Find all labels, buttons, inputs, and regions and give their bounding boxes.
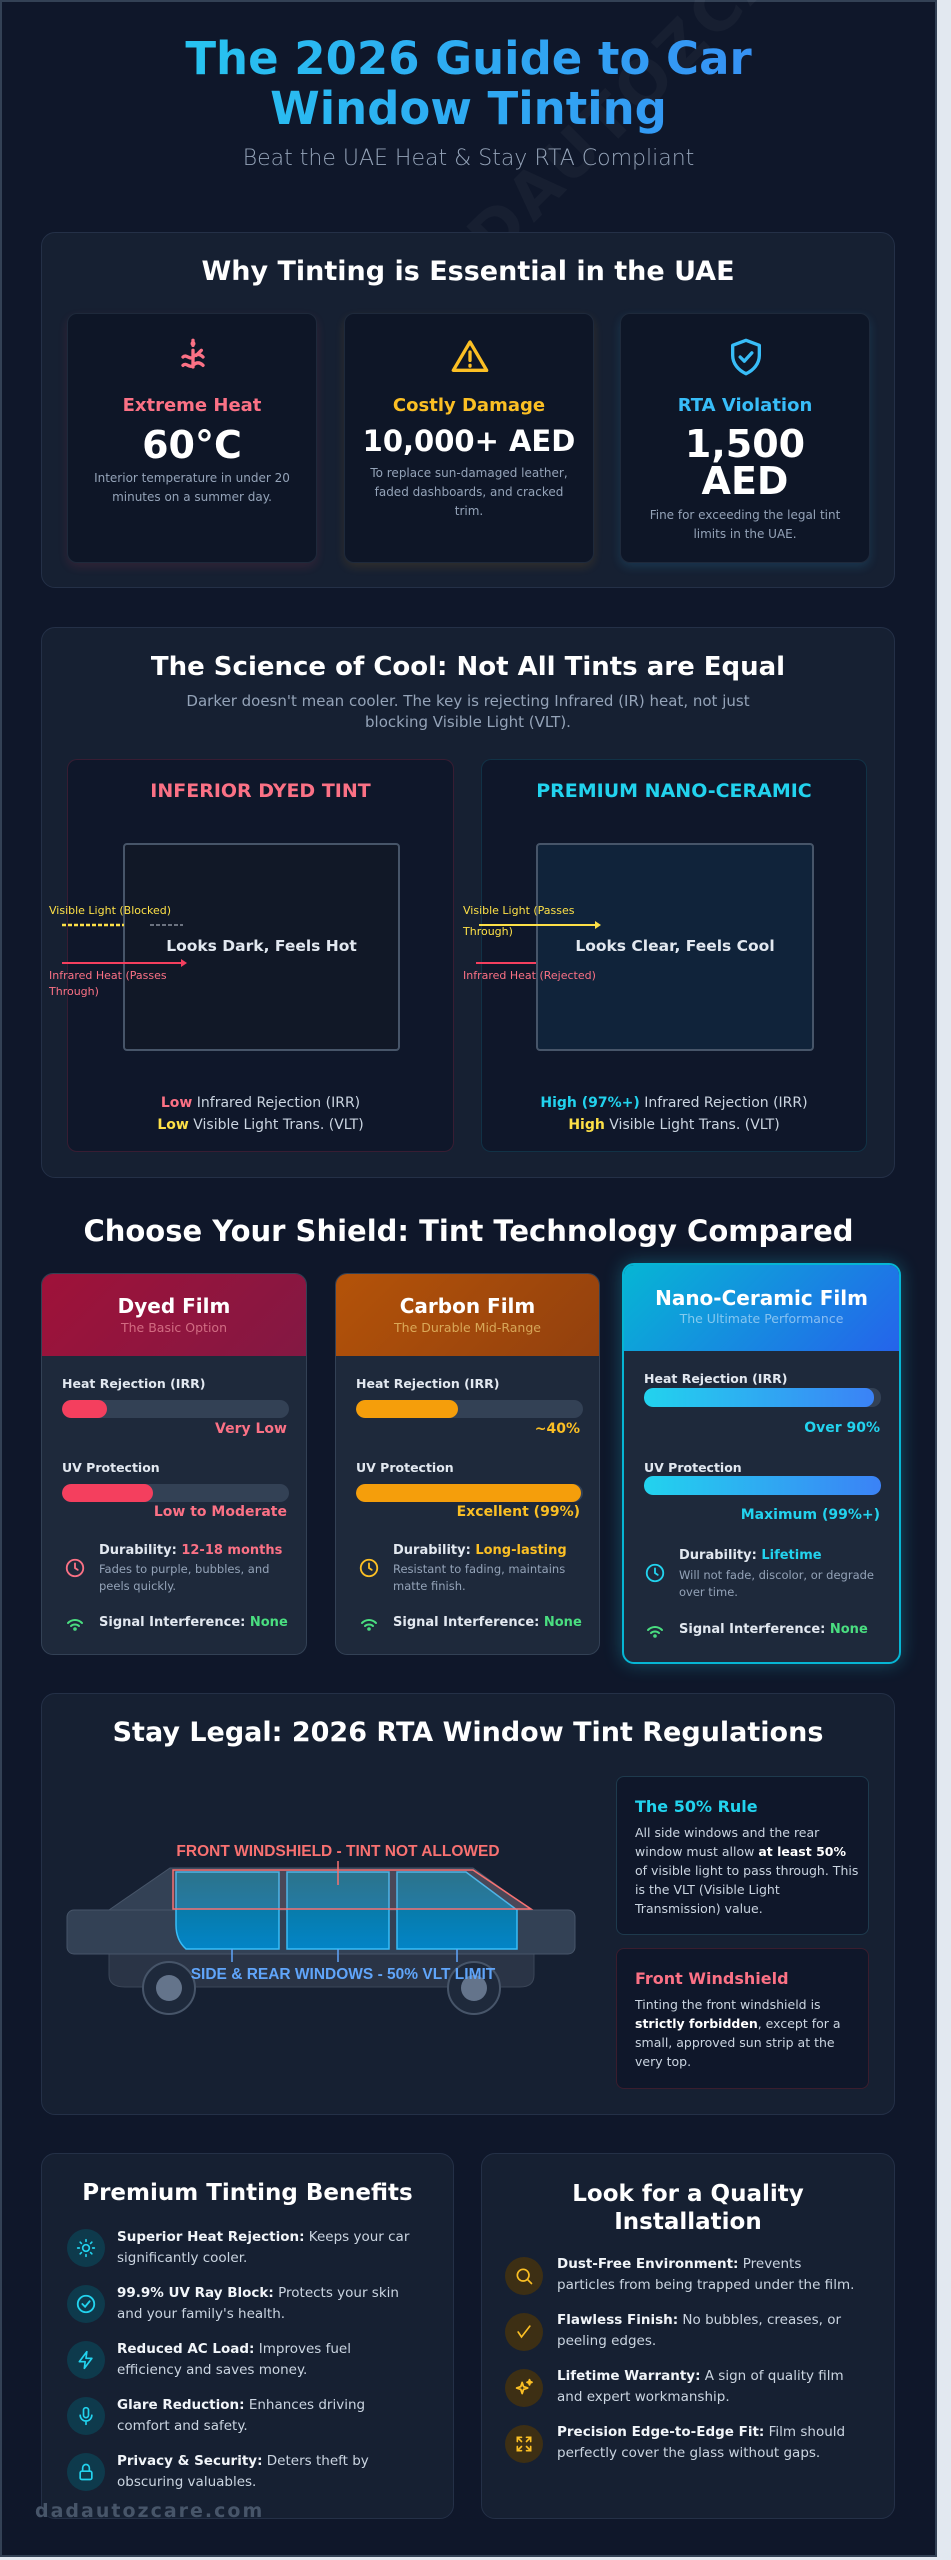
panel: quality installation: Dust-Free Environment: Prevents [557,2256,801,2272]
light arrows [462,904,601,982]
card: carbon film: The Durable Mid-Range [394,1320,541,1335]
heading: Stay Legal: 2026 RTA Window Tint Regulations [113,1717,823,1748]
light arrows: Visible Light (Blocked) [49,904,171,917]
light arrows: Infrared Heat (Rejected) [463,969,596,982]
light arrows: Infrared Heat (Passes [49,969,167,982]
heading: Why Tinting is Essential in the UAE [201,256,735,287]
panel: premium benefits: Premium Tinting Benefits [82,2180,413,2206]
card: dyed film: Signal Interference: None [99,1615,288,1630]
item: warranty [505,2369,543,2407]
panel: science of cool [41,627,895,1178]
light arrows: Through) [48,985,99,998]
card: dyed film: Heat Rejection (IRR) [62,1376,205,1391]
item: precision fit [505,2425,543,2463]
card: carbon film: UV Protection [356,1460,454,1475]
card: dyed film: Durability: 12-18 months [99,1543,282,1558]
card: RTA violation: 1,500 [685,422,805,466]
card: carbon film: Resistant to fading, maintains matte finish. [393,1562,565,1593]
heading: choose your shield: Choose Your Shield: Tint Technology Compared [83,1214,854,1248]
panel: dyed tint diagram [67,759,454,1152]
card: extreme heat: Interior temperature in under 20 minutes on a summer day. [94,471,290,504]
car diagram: FRONT WINDSHIELD - TINT NOT ALLOWED [176,1843,500,1860]
panel: quality installation: particles from being trapped under the film. [557,2277,854,2293]
item: flawless [505,2313,543,2351]
panel: dyed tint diagram: INFERIOR DYED TINT [150,780,371,802]
card: carbon film: Carbon Film [400,1294,535,1318]
car diagram [66,1843,576,2015]
panel: premium benefits: efficiency and saves money. [117,2362,307,2378]
title [0,34,937,134]
card: costly damage: 10,000+ AED [363,424,575,458]
panel: nano ceramic diagram: High (97%+) Infrared Rejection (IRR) [540,1095,808,1111]
panel: premium benefits: Glare Reduction: Enhances driving [117,2397,365,2413]
intro text: Darker doesn't mean cooler. The key is rejecting Infrared (IR) heat, not just [186,692,750,710]
panel: premium benefits [41,2153,454,2519]
intro text [186,692,750,731]
intro text: blocking Visible Light (VLT). [365,713,571,731]
card: carbon film: Durability: Long-lasting [393,1543,567,1558]
benefit: glare [67,2397,105,2435]
benefit: uv [67,2285,105,2323]
benefit: ac [67,2341,105,2379]
card: dyed film [41,1273,307,1655]
info: front windshield [616,1948,869,2089]
card: carbon film: Excellent (99%) [457,1504,580,1520]
panel: premium benefits: 99.9% UV Ray Block: Protects your skin [117,2285,399,2301]
panel: dyed tint diagram: Looks Dark, Feels Hot [166,937,357,955]
icon: thermometer [181,338,205,369]
card: costly damage: To replace sun-damaged leather, faded dashboards, and cracked trim. [370,466,568,518]
panel: premium benefits: and your family's health. [117,2306,285,2322]
card: nano-ceramic film: Durability: Lifetime [679,1548,822,1563]
info: 50% rule [616,1776,869,1935]
card: extreme heat [67,313,317,563]
panel: quality installation: Lifetime Warranty: A sign of quality film [557,2368,844,2384]
card: nano-ceramic film: Will not fade, discolor, or degrade over time. [679,1568,874,1599]
card: carbon film: Heat Rejection (IRR) [356,1376,499,1391]
card: RTA violation: Fine for exceeding the legal tint limits in the UAE. [650,508,840,541]
panel: premium benefits: Privacy & Security: Deters theft by [117,2453,369,2469]
panel: stay legal [41,1693,895,2115]
card: nano-ceramic film: The Ultimate Performance [680,1311,843,1326]
car diagram: SIDE & REAR WINDOWS - 50% VLT LIMIT [191,1966,496,1983]
card: nano-ceramic film: Signal Interference: None [679,1622,868,1637]
benefit: privacy [67,2453,105,2491]
glass box [536,843,814,1051]
card: dyed film: Low to Moderate [154,1504,287,1520]
card: nano-ceramic film: Maximum (99%+) [741,1507,880,1523]
panel: nano ceramic diagram: High Visible Light Trans. (VLT) [568,1117,780,1133]
info: front windshield: Front Windshield [635,1969,789,1988]
card: RTA violation: RTA Violation [678,395,812,416]
panel: premium benefits: Superior Heat Rejection: Keeps your car significantly cooler. [117,2229,409,2266]
glass box [123,843,400,1051]
card: dyed film: Very Low [215,1421,287,1437]
card: RTA violation [620,313,870,563]
card: nano-ceramic film: Nano-Ceramic Film [655,1286,868,1310]
light arrows [48,904,187,998]
panel: quality installation: perfectly cover the glass without gaps. [557,2445,820,2461]
card: costly damage [344,313,594,563]
panel: premium benefits: obscuring valuables. [117,2474,256,2490]
panel: quality installation: Precision Edge-to-Edge Fit: Film should [557,2424,845,2440]
title: The 2026 Guide to Car [185,32,752,85]
panel: quality installation: and expert workmanship. [557,2389,730,2405]
info: 50% rule: All side windows and the rear window must allow at least 50% of visible light to pass through. This is the VLT (Visible Light Transmission) value. [635,1825,858,1916]
card: dyed film: The Basic Option [121,1320,227,1335]
panel: quality installation [481,2153,895,2519]
light arrows: Visible Light (Passes [463,904,575,917]
subtitle: Beat the UAE Heat & Stay RTA Compliant [243,146,694,171]
icon: warning [452,340,488,372]
panel: quality installation: peeling edges. [557,2333,656,2349]
card: nano-ceramic film: Over 90% [804,1420,880,1436]
card: nano-ceramic film [622,1263,901,1664]
panel: nano ceramic diagram [481,759,867,1152]
card: carbon film [335,1273,600,1655]
panel: quality installation: Look for a Quality [572,2181,804,2207]
panel: why tinting [41,232,895,588]
card: nano-ceramic film: Heat Rejection (IRR) [644,1371,787,1386]
card: dyed film: UV Protection [62,1460,160,1475]
heading: The Science of Cool: Not All Tints are Equal [151,652,785,682]
panel: nano ceramic diagram: PREMIUM NANO-CERAMIC [536,780,812,802]
item: dust-free [505,2257,543,2295]
card: dyed film: Fades to purple, bubbles, and peels quickly. [99,1562,269,1593]
card: RTA violation: AED [702,459,788,503]
card: nano-ceramic film: UV Protection [644,1460,742,1475]
card: dyed film: Dyed Film [118,1294,230,1318]
watermark footer: dadautozcare.com [35,2500,264,2522]
title: Window Tinting [270,82,667,135]
icon: shield [731,338,761,376]
panel: quality installation: Flawless Finish: No bubbles, creases, or [557,2312,841,2328]
card: extreme heat: 60°C [142,423,242,467]
panel: premium benefits: Reduced AC Load: Improves fuel [117,2341,351,2357]
info: 50% rule: The 50% Rule [635,1797,758,1816]
benefit: heat [67,2229,105,2267]
light arrows: Through) [462,925,513,938]
card: extreme heat: Extreme Heat [123,395,261,416]
card: carbon film: Signal Interference: None [393,1615,582,1630]
panel: premium benefits: comfort and safety. [117,2418,248,2434]
panel: nano ceramic diagram: Looks Clear, Feels Cool [575,937,775,955]
panel: quality installation: Installation [614,2209,762,2235]
info: front windshield: Tinting the front windshield is strictly forbidden, except for a small, approved sun strip at the very top. [635,1997,841,2069]
card: carbon film: ~40% [535,1421,580,1437]
panel: dyed tint diagram: Low Visible Light Trans. (VLT) [157,1117,364,1133]
panel: dyed tint diagram: Low Infrared Rejection (IRR) [161,1095,360,1111]
card: costly damage: Costly Damage [393,395,545,416]
